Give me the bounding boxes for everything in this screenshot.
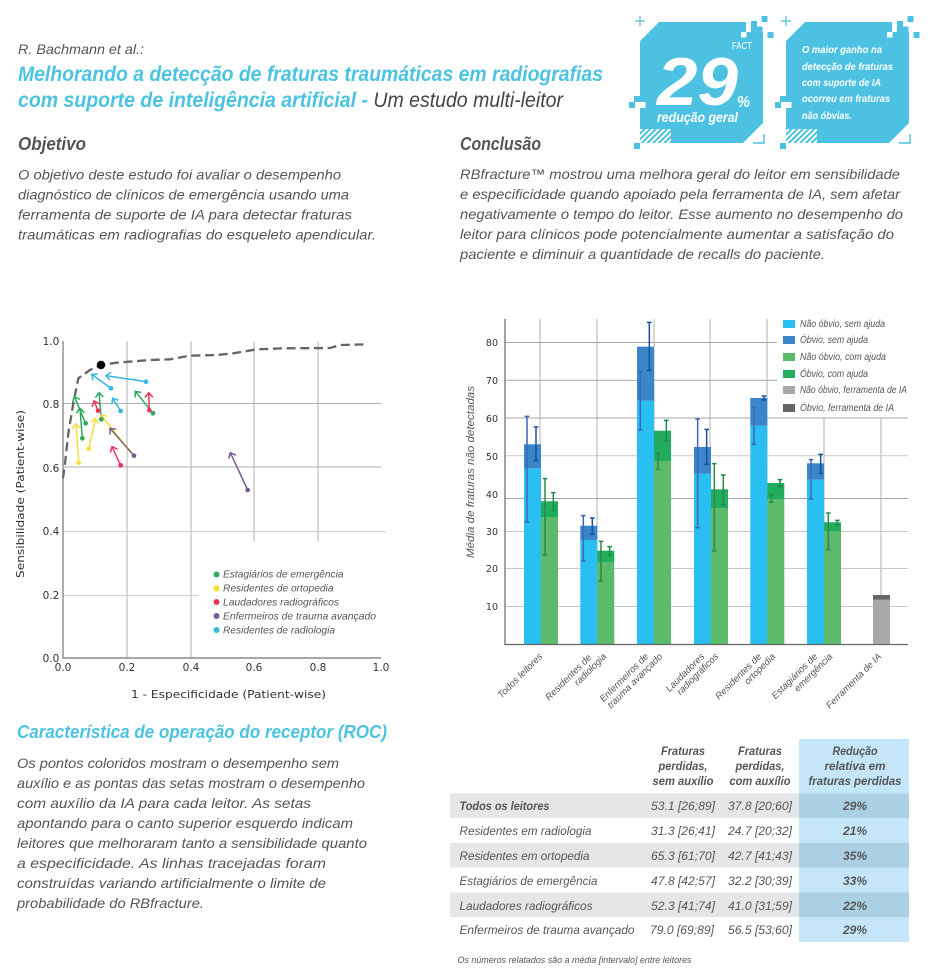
panel: fact 29%: redução geral	[657, 110, 738, 125]
table rows: 21%	[842, 824, 867, 838]
x axis category labels	[496, 651, 884, 711]
operating point	[97, 361, 105, 369]
table rows: Todos os leitores	[460, 799, 550, 813]
table rows: 24.7 [20;32]	[727, 824, 793, 838]
panel: fact text: com suporte de IA	[802, 78, 881, 89]
table rows: 47.8 [42;57]	[651, 874, 716, 888]
y axis labels	[486, 338, 498, 613]
bars: obvious, aided	[541, 431, 841, 562]
text block: ROC description: leitores que melhoraram tanto a sensibilidade quanto	[17, 835, 367, 851]
dashed ROC line	[63, 344, 367, 478]
y axis labels: 80	[486, 338, 498, 349]
table header: perdidas,	[735, 759, 784, 773]
x axis tick labels: 0.6	[246, 662, 263, 674]
text block: conclusão: negativamente o tempo do leitor. Esse aumento no desempenho do	[460, 206, 903, 222]
text block: conclusão: RBfracture™ mostrou uma melhora geral do leitor em sensibilidade	[460, 166, 900, 182]
x axis category labels: Estagiários de	[770, 651, 820, 702]
table rows: Residentes em ortopedia	[460, 849, 590, 863]
heading: ROC: Característica de operação do receptor (ROC)	[17, 722, 387, 742]
chart: missed fractures bars	[465, 319, 908, 711]
bar legend: Não óbvio, sem ajuda	[800, 319, 885, 330]
x axis category labels: trauma avançado	[605, 651, 665, 711]
bar legend: Óbvio, ferramenta de IA	[800, 401, 894, 414]
text block: conclusão	[459, 166, 903, 262]
table rows: 37.8 [20;60]	[728, 799, 793, 813]
y axis tick labels: 0.6	[43, 463, 60, 475]
x axis category labels: Residentes de	[543, 652, 594, 703]
chart: ROC curve	[15, 336, 389, 701]
y axis labels: 20	[486, 564, 498, 575]
table header	[652, 744, 902, 788]
title: com suporte de inteligência artificial - Um estudo multi-leitor	[18, 89, 564, 112]
bar legend	[783, 319, 907, 414]
ROC legend: Enfermeiros de trauma avançado	[223, 610, 376, 622]
panel: fact text: O maior ganho na	[802, 45, 882, 56]
y axis labels: 10	[486, 602, 498, 613]
text block: objetivo: O objetivo deste estudo foi avaliar o desempenho	[18, 166, 341, 182]
y axis tick labels: 0.0	[43, 653, 59, 665]
x axis tick labels: 0.2	[119, 662, 135, 674]
bars: AI tool	[873, 595, 890, 644]
table rows: 33%	[843, 874, 867, 888]
x axis tick labels: 0.0	[55, 662, 71, 674]
y axis tick labels: 0.4	[43, 526, 60, 538]
x axis title: 1 - Especificidade (Patient-wise)	[131, 689, 326, 701]
table rows: 22%	[842, 899, 867, 913]
bar legend: Óbvio, com ajuda	[800, 367, 868, 380]
table rows: 29%	[842, 799, 867, 813]
table header: sem auxílio	[652, 774, 714, 788]
x axis tick labels: 0.4	[183, 662, 200, 674]
x axis tick labels: 1.0	[373, 662, 389, 674]
x axis category labels: radiologia	[572, 651, 609, 688]
y axis tick labels	[43, 336, 60, 665]
table rows: 65.3 [61;70]	[651, 849, 716, 863]
y axis labels: 40	[486, 490, 498, 501]
y axis tick labels: 0.2	[43, 590, 59, 602]
title: Melhorando a detecção de fraturas traumáticas em radiografias	[18, 63, 603, 86]
text block: ROC description	[16, 755, 367, 911]
table rows: Estagiários de emergência	[460, 874, 598, 888]
table rows: 52.3 [41;74]	[651, 899, 716, 913]
panel: fact text: ocorreu em fraturas	[802, 94, 890, 105]
table header: fraturas perdidas	[808, 774, 902, 788]
table header: perdidas,	[658, 759, 708, 773]
panel: fact 29%	[629, 16, 774, 149]
panel: fact 29%: %	[737, 94, 750, 111]
bar legend: Não óbvio, com ajuda	[800, 352, 886, 363]
x axis tick labels: 0.8	[310, 662, 326, 674]
table header: Redução	[832, 744, 878, 758]
y axis title: Sensibilidade (Patient-wise)	[15, 410, 27, 578]
bars: not obvious, unaided	[524, 401, 824, 644]
table: missed fractures	[450, 739, 909, 942]
bars: obvious, unaided	[524, 347, 824, 540]
table rows: 79.0 [69;89]	[650, 923, 715, 937]
table rows: Laudadores radiográficos	[460, 899, 592, 913]
ROC legend: Residentes de radiologia	[223, 624, 335, 636]
text block: ROC description: com auxílio da IA para cada leitor. As setas	[17, 795, 311, 811]
x axis category labels: Todos leitores	[496, 651, 545, 701]
table rows: 32.2 [30;39]	[728, 874, 793, 888]
heading: Conclusão: Conclusão	[460, 134, 541, 154]
x axis category labels: ortopedia	[742, 651, 778, 687]
table rows: 29%	[842, 923, 867, 937]
table header: com auxílio	[730, 774, 790, 788]
panel: fact 29%: 29	[655, 44, 738, 120]
text block: objetivo	[18, 166, 376, 242]
panel: fact text: detecção de fraturas	[802, 62, 893, 73]
bars: not obvious, aided	[541, 461, 841, 644]
table rows: 56.5 [53;60]	[728, 923, 793, 937]
text block: ROC description: probabilidade do RBfracture.	[16, 895, 204, 911]
text block: ROC description: a especificidade. As linhas tracejadas foram	[17, 855, 326, 871]
text block: conclusão: leitor para clínicos pode potencialmente aumentar a satisfação do	[460, 226, 894, 242]
table header: Fraturas	[661, 744, 705, 758]
panel: fact 29%: FACT	[732, 41, 752, 52]
table rows: 31.3 [26;41]	[651, 824, 716, 838]
table rows: Enfermeiros de trauma avançado	[460, 923, 635, 937]
title	[18, 63, 603, 112]
x axis category labels: radiográficos	[675, 651, 721, 698]
y axis labels: 70	[486, 376, 498, 387]
ROC legend: Estagiários de emergência	[223, 568, 344, 580]
text block: ROC description: Os pontos coloridos mostram o desempenho sem	[17, 755, 339, 771]
y axis labels: 60	[486, 414, 498, 425]
table rows	[460, 799, 867, 937]
panel: fact text: não óbvias.	[802, 111, 852, 122]
bar legend: Óbvio, sem ajuda	[800, 333, 868, 346]
x axis tick labels	[55, 662, 389, 674]
x axis category labels: Laudadores	[664, 651, 707, 695]
text block: ROC description: apontando para o canto superior esquerdo indicam	[17, 815, 353, 831]
table rows: 53.1 [26;89]	[651, 799, 716, 813]
text block: objetivo: ferramenta de suporte de IA para detectar fraturas	[18, 206, 352, 222]
ROC legend: Residentes de ortopedia	[223, 582, 334, 594]
text block: conclusão: paciente e diminuir a quantidade de recalls do paciente.	[459, 246, 825, 262]
footnote: Os números relatados são a média [intervalo] entre leitores	[458, 955, 692, 965]
table rows: 35%	[843, 849, 867, 863]
panel: fact text	[775, 16, 920, 149]
table header: relativa em	[824, 759, 886, 773]
bar legend: Não óbvio, ferramenta de IA	[800, 385, 907, 396]
x axis category labels: Enfermeiros de	[598, 651, 651, 705]
x axis category labels: Ferramenta de IA	[824, 651, 884, 711]
ROC legend	[214, 568, 376, 636]
table rows: 41.0 [31;59]	[728, 899, 793, 913]
text block: objetivo: diagnóstico de clínicos de emergência usando uma	[18, 186, 349, 202]
x axis category labels: emergência	[792, 651, 835, 694]
text block: objetivo: traumáticas em radiografias do esqueleto apendicular.	[18, 226, 376, 242]
y axis tick labels: 0.8	[43, 399, 59, 411]
ROC legend: Laudadores radiográficos	[223, 596, 340, 608]
text block: ROC description: construídas variando artificialmente o limite de	[17, 875, 326, 891]
y axis title: Média de fraturas não detectadas	[465, 385, 477, 558]
table rows: 42.7 [41;43]	[728, 849, 793, 863]
x axis category labels: Residentes de	[713, 651, 764, 702]
y axis labels: 50	[486, 452, 498, 463]
table header: Fraturas	[738, 744, 782, 758]
text block: conclusão: e especificidade quando apoiado pela ferramenta de IA, sem afetar	[460, 186, 901, 202]
error bars	[525, 322, 840, 581]
heading: Objetivo: Objetivo	[18, 134, 86, 154]
reader arrows	[74, 374, 250, 492]
y axis labels: 30	[486, 527, 498, 538]
author line: R. Bachmann et al.:	[18, 41, 144, 57]
y axis tick labels: 1.0	[43, 336, 59, 348]
table rows: Residentes em radiologia	[460, 824, 592, 838]
text block: ROC description: auxílio e as pontas das setas mostram o desempenho	[17, 775, 365, 791]
